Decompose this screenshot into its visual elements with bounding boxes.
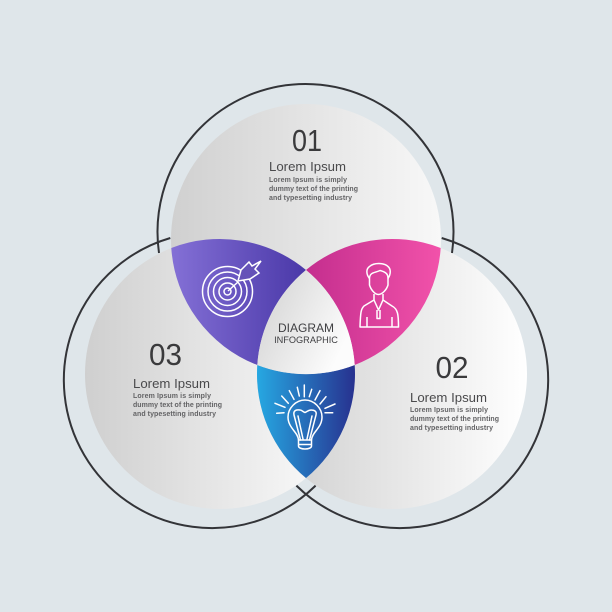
overlap: purple: [171, 239, 306, 365]
text: section 01: Lorem Ipsum is simply: [269, 177, 347, 184]
outer ring: right: [296, 238, 548, 528]
circle: top: [171, 104, 441, 374]
centre label: DIAGRAM: [278, 321, 334, 335]
text: section 03: and typesetting industry: [133, 411, 216, 418]
icon: person: [360, 264, 398, 327]
centre label: INFOGRAPHIC: [274, 335, 338, 345]
text: section 02: Lorem Ipsum: [410, 390, 487, 405]
text: section 02: 02: [436, 350, 468, 385]
text: section 02: and typesetting industry: [410, 425, 493, 432]
text: section 03: Lorem Ipsum: [133, 376, 210, 391]
outer ring: left: [64, 238, 316, 528]
text: section 02: [410, 350, 499, 432]
text: section 03: dummy text of the printing: [133, 402, 222, 409]
overlap: pink: [306, 239, 441, 365]
icon: light bulb: [275, 385, 335, 449]
centre label: [274, 321, 338, 345]
text: section 01: Lorem Ipsum: [269, 159, 346, 174]
text: section 02: Lorem Ipsum is simply: [410, 407, 488, 414]
text: section 01: and typesetting industry: [269, 195, 352, 202]
overlap: centre: [257, 270, 355, 374]
text: section 03: [133, 337, 222, 418]
circle: right: [257, 239, 527, 509]
text: section 03: Lorem Ipsum is simply: [133, 393, 211, 400]
text: section 02: dummy text of the printing: [410, 416, 499, 423]
overlap: blue: [257, 365, 355, 478]
outer ring: top: [157, 84, 453, 253]
text: section 01: [269, 123, 358, 202]
icon: target with arrow: [202, 261, 261, 316]
text: section 01: 01: [292, 123, 322, 158]
circle: left: [85, 239, 355, 509]
text: section 03: 03: [149, 337, 182, 372]
text: section 01: dummy text of the printing: [269, 186, 358, 193]
